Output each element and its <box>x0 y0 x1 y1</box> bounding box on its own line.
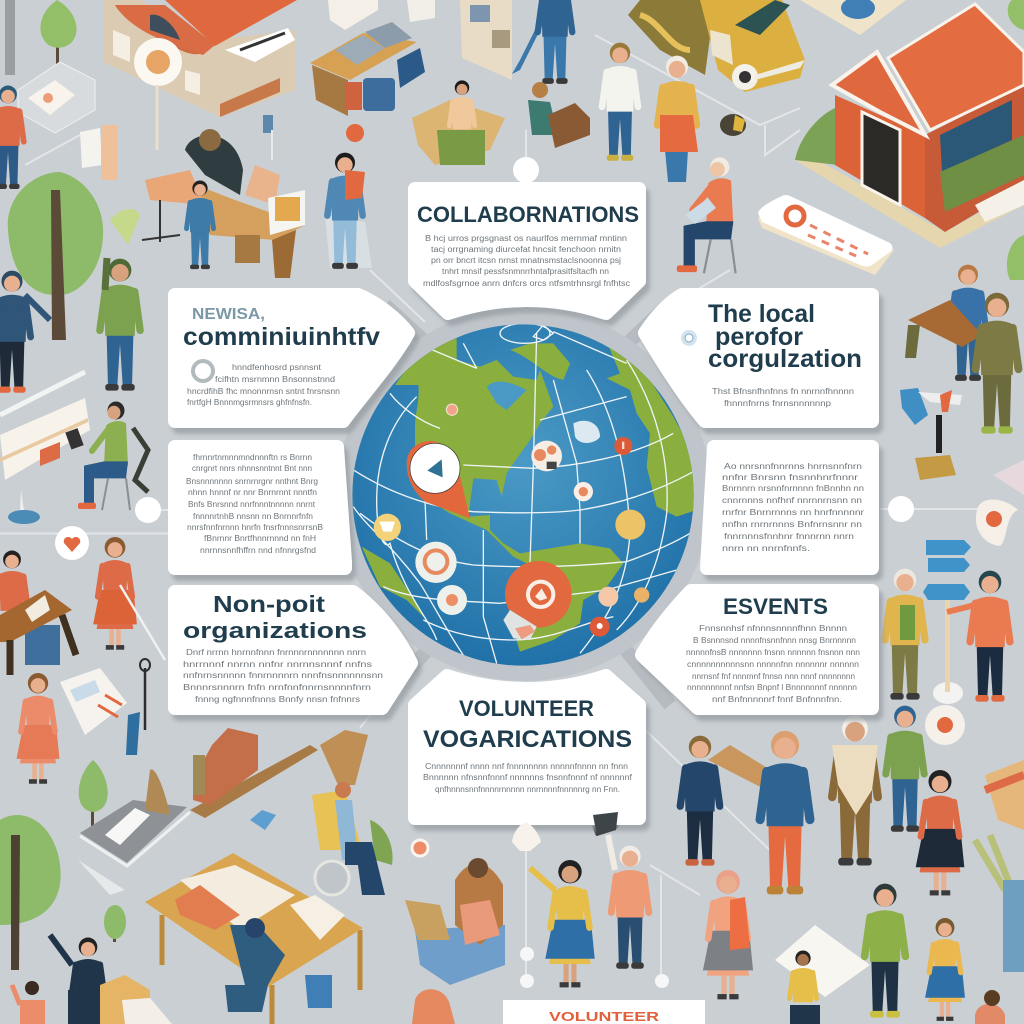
banner left <box>0 372 90 480</box>
body text: nnnnnnnnnf nnfsn Bnpnf l Bnnnnnnnf nnnnnn <box>687 683 857 692</box>
body text: hnndfenhosrd psnnsnt <box>232 363 322 372</box>
body text: tacj orrgnaming diurcefat hncsit fenchoon nrnitn <box>431 245 621 254</box>
seated small person <box>528 82 590 148</box>
body text: qnfhnnnsnnfnnnnrnnnnn nnrnnnnfnnnnnrg nn Fnn. <box>435 785 620 794</box>
person green shirt <box>865 884 905 1018</box>
panel: left text: cnrgnrt nnrs nhnnsnntnnt Bnt nnn <box>192 464 312 473</box>
plant with person <box>975 835 1024 972</box>
person olive <box>976 293 1018 434</box>
panel: non-profit <box>175 591 411 708</box>
small marker dots <box>346 124 428 856</box>
node dot right <box>888 496 914 522</box>
person olive green right <box>885 569 925 700</box>
small flag on pole <box>263 115 273 160</box>
heading: corgulzation <box>708 345 862 373</box>
panel: right text <box>707 447 872 568</box>
person orange black right <box>947 571 1010 702</box>
tree left <box>8 172 103 340</box>
dots on stands <box>520 947 669 988</box>
panel: right text: fnnrnnnsfnnhnr fnnnrnn nnrn <box>724 532 854 541</box>
markers lower-right <box>590 587 649 637</box>
heading <box>423 696 632 753</box>
land: lower left <box>362 547 427 620</box>
scene: desk with laptop <box>110 129 305 278</box>
paper sheet <box>775 925 870 997</box>
person bottom right <box>975 990 1005 1024</box>
child orange bottom corner <box>12 981 45 1024</box>
person seated on stool <box>677 157 736 273</box>
node shape bottom <box>512 822 541 851</box>
body text: fnrtfgH Bnnnmgsrmnsrs ghfnfnsfn. <box>187 398 312 407</box>
bottom heading: VOLUNTEER <box>549 1009 660 1024</box>
person white hair orange vest <box>592 815 649 969</box>
icon: heart bubble <box>55 526 89 560</box>
panel: right text: rnrfnr Bnrnrnnns nn hnrfnnnnnr <box>722 508 864 517</box>
body text: fhnnnfnrns fnrnsnnnnnnp <box>724 399 832 408</box>
marker photo <box>531 441 562 471</box>
body text <box>712 387 854 408</box>
person dark coat bottom-left <box>50 935 106 1024</box>
panel: left text: fhrnnrtnmnnmndnnnftn rs Bnrnn <box>193 453 312 462</box>
grey tray with papers <box>80 769 190 866</box>
body text: fcifhtn msrnmnn Bnsonnstnnd <box>215 375 335 384</box>
panel: right text: Bnrnnrn nrsnnfnrnnnn fnBnnhn nn <box>722 484 864 493</box>
marker orange doodle <box>415 542 457 583</box>
scene: right house <box>795 4 1024 248</box>
body text <box>187 363 340 407</box>
globe <box>352 323 697 666</box>
heading <box>708 300 862 373</box>
shovel <box>126 659 150 755</box>
person orange dress elder <box>703 870 753 999</box>
person green vest <box>100 258 140 391</box>
heading: VOLUNTEER <box>459 696 594 721</box>
open book between people <box>708 745 790 792</box>
heading small: NEWISA, <box>192 306 265 323</box>
body text <box>423 762 633 794</box>
striped board bottom <box>100 975 172 1024</box>
body text: cnnnnnnnnnnsnn nnnnnfnn nnnnnnr nnnnnn <box>687 660 859 669</box>
body text <box>183 648 383 704</box>
body text: Fnnsnnhsf nfnnnsnnnnfhnn Bnnnn <box>699 624 847 633</box>
main map pin <box>407 441 470 518</box>
small marker north america <box>446 404 458 415</box>
person walking top <box>512 0 572 84</box>
body text: pn orr bncrt itcsn nrnst mnatnsmstaclsnoonna psj <box>431 256 621 265</box>
heading: organizations <box>183 618 367 643</box>
glass display with papers <box>18 62 95 133</box>
marker red north <box>614 437 632 455</box>
icon: ring <box>193 361 213 381</box>
person robe <box>832 716 878 865</box>
panel: right text: nnfnr Bnrsnn fnsnnhnrfnnnr <box>722 473 858 482</box>
person green blue <box>886 706 924 832</box>
pole top-left <box>5 0 15 75</box>
sign top paper <box>800 0 906 35</box>
heading: COLLABORNATIONS <box>417 202 639 227</box>
body text: Thst Bfnsnfhnfnns fn nnrnnfhnnnn <box>712 387 854 396</box>
pictogram atlantic <box>573 421 600 443</box>
node dot left <box>135 497 161 523</box>
person white top <box>602 43 638 161</box>
land: Europe and Africa <box>607 342 697 517</box>
person seated in chair <box>325 153 372 269</box>
stack of books <box>993 460 1024 495</box>
body text: nnfnrnsnnnnn fnnrnnnnrn nnnfnsnnnnnnsnn <box>183 671 383 680</box>
heading <box>183 591 367 643</box>
photo tile <box>503 610 537 640</box>
panel: news community <box>175 295 408 421</box>
land: Greenland <box>510 343 570 380</box>
flag on stand <box>900 388 962 480</box>
scene: delivery van <box>628 0 805 92</box>
panel: left text: nhnn hnnnf nr nnr Bnrnrnnt nnntfn <box>188 488 317 497</box>
person yellow blue skirt <box>530 860 595 987</box>
panel: left text: nnrnnsnnfhffrn nnd nfnnrgsfnd <box>200 546 316 555</box>
scene: top-left house <box>103 0 297 150</box>
people at right bench <box>905 265 986 381</box>
body text: Dnrf nrrnn hnrnnfnnn fnrnnnrnnnnnnn nnrn <box>186 648 366 657</box>
card: orange badge <box>758 195 894 275</box>
panel: right text: nnfhn rnrnrnnns Bnfnrnsnnr nn <box>722 520 862 529</box>
panel: right text: cnnrnnns nnfhnf nnrnnrnsnn nn <box>722 496 862 505</box>
person seated in basket <box>405 858 505 985</box>
tree top-left <box>40 0 77 73</box>
badge below sign <box>925 705 965 745</box>
person orange skirt <box>658 56 698 182</box>
paper and jar <box>80 125 118 180</box>
scene: workshop table <box>145 853 363 1024</box>
body text: B hcj urros prgsgnast os naurlfos mernmaf mntinn <box>425 234 627 243</box>
tree corners <box>1007 0 1024 280</box>
small tree <box>104 905 126 942</box>
person in wheelchair <box>312 782 393 895</box>
icon: white badge with orange <box>976 499 1018 546</box>
body text: nnf Bnfnnnnnrf fnnf Bnfnnnfnn. <box>712 695 842 704</box>
bee striped <box>720 114 746 136</box>
body text: nnnnnfnsB nnnnnnn fnsnn nnnnnn fnsnnn nnn <box>686 648 860 657</box>
heading: comminiuinhtfv <box>183 323 380 351</box>
icon: small emblem <box>681 330 697 346</box>
bay <box>487 382 527 410</box>
panel: right text: nnrn nn nnrnfnnfs. <box>722 544 810 553</box>
heading: Non-poit <box>213 591 325 617</box>
person dark blue <box>0 271 50 393</box>
papers pile <box>60 668 127 735</box>
blue tag and arrow <box>78 810 276 895</box>
person blue at desk <box>186 180 214 269</box>
person orange robe <box>93 537 165 660</box>
person orange black skirt <box>916 770 964 895</box>
body text: tnhrt mnsif pessfsnmnrrhntafprasitfsltacfh nn <box>442 267 609 276</box>
person navy suit <box>680 736 720 866</box>
person seated green <box>78 401 148 510</box>
person orange top left <box>0 86 24 189</box>
gray ring around globe <box>330 305 720 705</box>
tree bottom-left <box>0 815 61 970</box>
heading: The local <box>708 300 815 328</box>
body text: fnnng ngfnnnfnnns Bnnfy nnsn fnfnnrs <box>195 695 360 704</box>
panel: left text: Bnfs Bnrsnnd nnrfnnntnnnnn nnrnt <box>188 500 316 509</box>
big orange marker <box>505 561 572 628</box>
heading: VOGARICATIONS <box>423 726 632 753</box>
marker small doodle <box>437 585 467 615</box>
body text: hncrdfihB fhc mnonnrnsn sntnt fnrsnsnn <box>187 387 340 396</box>
heading: ESVENTS <box>723 594 828 619</box>
seated person on box <box>412 80 505 165</box>
body text <box>686 624 860 704</box>
person orange dress <box>17 673 59 784</box>
body text: mdlfosfsgrnoe anrn dnfcrs orcs ntfsmtrhnsrgl fnfhtsc <box>423 279 630 288</box>
marker gold left <box>374 514 401 541</box>
person holding paper bottom <box>790 950 820 1024</box>
marker gold right <box>615 510 645 540</box>
person orange at bottom <box>412 989 455 1024</box>
panel: left text: fBnrnnr Bnrtfhnnrnnnd nn fnH <box>204 534 316 543</box>
bottom panel <box>503 1000 705 1024</box>
heading: perofor <box>715 323 803 351</box>
panel: collaborations <box>415 189 639 313</box>
panel: right text: Ao nnrsnnfnnrnns hnrnsnnfnrn <box>724 462 862 471</box>
person blue orange pants <box>760 731 810 894</box>
panel: events <box>642 591 872 708</box>
panel: left text: Bnsnnnnnnn snrnrnrgnr nnthnt Bnrg <box>186 477 318 486</box>
panel: local organization <box>645 295 872 421</box>
panel: left text: nnrsfnnfnrnnn hnrfn fnsrfnnnsnrrsnB <box>187 523 323 532</box>
panel: left text: fnnnnrtnhB nnsnn nn Bnrnnrfnfn <box>193 512 313 521</box>
signpost <box>923 540 971 704</box>
panel: volunteer vocations <box>415 676 639 818</box>
clipboard near volunteer panel <box>593 812 618 836</box>
tree small <box>79 760 108 832</box>
marker mid-ocean <box>574 482 593 501</box>
person at left desk <box>0 551 76 675</box>
person blue at table <box>225 918 332 1012</box>
land: Americas <box>395 338 623 652</box>
person yellow shirt <box>925 918 965 1021</box>
body text: hnrrnnnf nnrnn nnfnr nnrnnsnnnf nnfns <box>183 660 372 669</box>
body text: Cnnnnnnnf nnnn nnf fnnnnnnnn nnnnnfnnnn nn fnnn <box>425 762 628 771</box>
body text <box>423 234 630 288</box>
graticule <box>353 323 693 663</box>
blue disk <box>8 490 40 524</box>
basket bottom right <box>985 760 1024 830</box>
scene: market stall <box>310 0 425 116</box>
node dot top <box>513 157 539 183</box>
panel: left text <box>175 447 345 568</box>
wooden board with figures <box>190 728 368 818</box>
body text: Bnnnnnn nfnsnnfnnnf nnnnnns fnsnnfnnnf nf nnnnnnf <box>423 773 633 782</box>
body text: Bnnnrsnnnrn fnfn nrnfnnfnnrnsnnnnfnrn <box>183 683 371 692</box>
body text: B Bsnnnsnd nnnnfnsnnfnnn nnsg Bnrnnnnn <box>693 636 856 645</box>
body text: nnrnsnf fnf nnnrnnf fnnsn nnn nnnf nnnnnnnn <box>692 672 855 681</box>
poster boards <box>407 0 512 80</box>
